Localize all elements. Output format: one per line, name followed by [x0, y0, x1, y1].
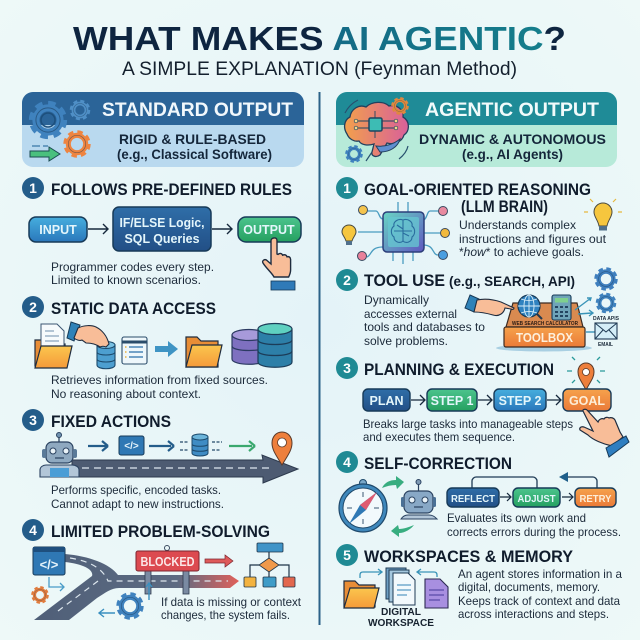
description: Limited to known scenarios. [51, 273, 201, 287]
badge 1 [336, 177, 358, 199]
section: workspaces and memory [336, 544, 622, 629]
sign: blocked: BLOCKED [140, 555, 194, 569]
heading: WORKSPACES & MEMORY [364, 548, 573, 566]
heading: GOAL-ORIENTED REASONING [364, 181, 591, 199]
forked road [34, 554, 239, 620]
badge 4 [22, 519, 44, 541]
icon: location pin [272, 432, 292, 465]
heading: (e.g., SEARCH, API) [449, 273, 575, 289]
flow diagram: INPUT [39, 223, 77, 237]
panel: standard output header [22, 92, 304, 167]
flow diagram: RETRY [580, 493, 612, 505]
description [364, 293, 485, 348]
description: An agent stores information in a [458, 567, 622, 581]
flow diagram: IF/ELSE Logic, [120, 216, 204, 230]
heading: STATIC DATA ACCESS [51, 300, 216, 318]
icon: calculator [552, 295, 571, 320]
icon: goal pin [567, 357, 605, 390]
heading: (LLM BRAIN) [461, 198, 548, 216]
description: Cannot adapt to new instructions. [51, 497, 224, 511]
badge 2 [22, 296, 44, 318]
icon: document stack [386, 568, 415, 605]
sign: blocked [136, 546, 199, 594]
loop arrows [472, 472, 597, 488]
description [51, 373, 268, 401]
flow diagram: SQL Queries [124, 232, 200, 246]
section: fixed actions [22, 409, 298, 511]
flow diagram [447, 488, 616, 507]
flow diagram: REFLECT [451, 493, 496, 505]
description: across interactions and steps. [458, 607, 609, 621]
badge 3: 3 [343, 360, 351, 376]
flow diagram [363, 389, 611, 411]
description: Understands complex [459, 218, 576, 232]
icon: folder with document [35, 324, 72, 368]
icon: email [586, 323, 617, 348]
icon: small bulb [342, 225, 356, 245]
process arrows: </> [124, 441, 139, 452]
description: Evaluates its own work and [447, 511, 586, 525]
description: and executes them sequence. [363, 430, 515, 444]
small arrow [49, 577, 64, 591]
description: *how* to achieve goals. [459, 245, 584, 259]
icon: pointing hand [465, 295, 514, 316]
description: Breaks large tasks into manageable steps [363, 417, 573, 431]
heading: agentic output: AGENTIC OUTPUT [425, 100, 599, 121]
description: Programmer codes every step. [51, 260, 214, 274]
subtitle: A SIMPLE EXPLANATION (Feynman Method) [122, 58, 517, 80]
description [51, 260, 214, 287]
link arrows [360, 569, 437, 578]
icon: data apis [578, 295, 620, 322]
description: If data is missing or context [161, 595, 302, 609]
icon: toolbox [496, 303, 592, 352]
heading: standard output: STANDARD OUTPUT [102, 100, 293, 121]
label: digital workspace [368, 606, 434, 629]
heading: TOOL USE [364, 272, 445, 290]
red arrow [205, 555, 233, 567]
badge 4: 4 [343, 454, 351, 470]
icon: pointing hand [580, 409, 629, 457]
heading [364, 181, 591, 216]
description: Performs specific, encoded tasks. [51, 483, 221, 497]
badge 4 [336, 451, 358, 473]
description: tools and databases to [364, 320, 485, 334]
badge 2: 2 [29, 299, 37, 315]
subheading: dynamic: DYNAMIC & AUTONOMOUS [419, 131, 606, 147]
icon: brain with chip [345, 99, 408, 161]
icon: compass [339, 480, 387, 532]
subheading: ai agents: (e.g., AI Agents) [462, 146, 563, 162]
description: No reasoning about context. [51, 387, 201, 401]
icon: purple document [425, 579, 448, 608]
icon: gear with arrow [575, 270, 615, 310]
flow diagram: STEP 1 [431, 394, 473, 408]
icon: large bulb [584, 199, 622, 230]
badge 4: 4 [29, 522, 37, 538]
title: WHAT MAKES AI AGENTIC ? [73, 20, 566, 57]
flow diagram [29, 207, 301, 251]
badge 1: 1 [343, 180, 351, 196]
icon: code window [33, 547, 65, 575]
panel: agentic output header [336, 92, 617, 167]
description: solve problems. [364, 334, 448, 348]
icon: email: EMAIL [598, 342, 613, 348]
badge 1 [22, 177, 44, 199]
flowchart [244, 543, 295, 587]
badge 3: 3 [29, 412, 37, 428]
heading: FIXED ACTIONS [51, 413, 171, 431]
icon: hand taking data [67, 322, 109, 347]
badge 2 [336, 269, 358, 291]
icon: gears and arrow [30, 102, 88, 161]
icon: purple database [232, 330, 266, 364]
process arrows [88, 434, 255, 456]
section: planning and execution [336, 357, 629, 457]
icon: data apis: DATA APIS [593, 316, 620, 322]
icon: database [97, 342, 115, 369]
icon: chip with brain [358, 202, 450, 264]
column divider [318, 92, 320, 625]
description: Dynamically [364, 293, 429, 307]
flow diagram: STEP 2 [499, 394, 541, 408]
icon: toolbox: WEB SEARCH CALCULATOR [512, 321, 578, 327]
icon: pointing hand [263, 238, 295, 290]
label: digital workspace: DIGITAL [381, 606, 422, 618]
subheading: rigid: RIGID & RULE-BASED [119, 131, 266, 147]
icon: folder [344, 581, 379, 608]
icon: blue gear with arrows [99, 583, 152, 617]
badge 1: 1 [29, 180, 37, 196]
description [447, 511, 621, 539]
subheading: classical software: (e.g., Classical Software) [117, 146, 272, 162]
section: tool use [336, 269, 620, 352]
description [51, 483, 224, 511]
description: Keeps track of context and data [458, 594, 620, 608]
icon: teal database [258, 324, 292, 367]
flow diagram: GOAL [569, 394, 605, 408]
description: changes, the system fails. [161, 608, 290, 622]
icon: small orange gear [33, 588, 47, 602]
description: corrects errors during the process. [447, 525, 621, 539]
badge 5: 5 [343, 547, 351, 563]
section: goal-oriented reasoning [336, 177, 622, 264]
description [459, 218, 607, 259]
icon: folder [186, 337, 222, 367]
heading: PLANNING & EXECUTION [364, 361, 554, 379]
label: digital workspace: WORKSPACE [368, 617, 434, 629]
description [363, 417, 573, 444]
flow diagram: OUTPUT [243, 223, 295, 237]
icon: globe [518, 295, 542, 319]
badge 3 [22, 409, 44, 431]
section: limited problem-solving [22, 519, 302, 622]
icon: code window: </> [40, 557, 59, 572]
heading: LIMITED PROBLEM-SOLVING [51, 523, 270, 541]
flow diagram: ADJUST [518, 493, 556, 505]
badge 5 [336, 544, 358, 566]
flow diagram: PLAN [369, 394, 404, 408]
description: Retrieves information from fixed sources. [51, 373, 268, 387]
icon: toolbox: TOOLBOX [516, 331, 574, 345]
description: instructions and figures out [459, 232, 607, 246]
icon: green cycle arrows [382, 476, 414, 537]
description: accesses external [364, 307, 457, 321]
icon: file list [122, 337, 147, 364]
section: static data access [22, 296, 292, 401]
heading: SELF-CORRECTION [364, 455, 512, 473]
section: self-correction [336, 451, 621, 539]
section: follows pre-defined rules [22, 177, 301, 290]
heading: FOLLOWS PRE-DEFINED RULES [51, 181, 292, 199]
description [458, 567, 622, 621]
icon: robot [401, 480, 437, 519]
description: digital, documents, memory. [458, 580, 600, 594]
heading [364, 272, 575, 290]
badge 2: 2 [343, 272, 351, 288]
badge 3 [336, 357, 358, 379]
arrow [155, 341, 178, 357]
road with arrowhead [72, 455, 298, 483]
description [161, 595, 302, 622]
icon: robot [40, 432, 79, 477]
